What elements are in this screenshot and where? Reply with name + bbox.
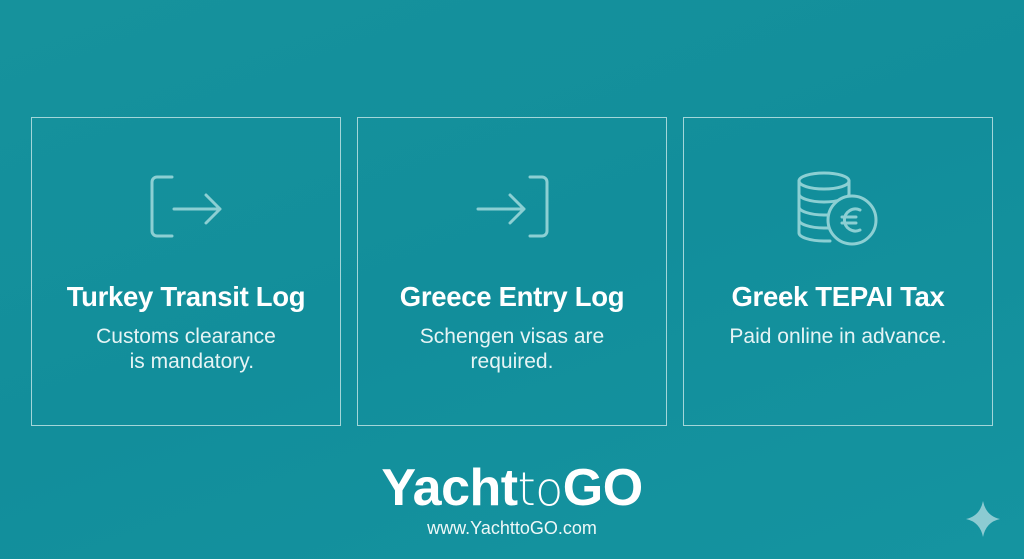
logo: YachttoGO xyxy=(381,459,643,517)
icon: exit arrow xyxy=(150,176,222,238)
url: www.YachttoGO.com xyxy=(427,518,597,538)
text: turkey: Customs clearance xyxy=(96,325,276,348)
panel: tepai xyxy=(683,117,993,426)
text: greece: required. xyxy=(471,350,553,373)
icon: entry arrow xyxy=(476,176,548,238)
heading: tepai: Greek TEPAI Tax xyxy=(731,281,945,312)
text: turkey: is mandatory. xyxy=(130,350,254,373)
text: turkey xyxy=(96,325,276,373)
icon: coins euro xyxy=(798,172,878,246)
text: greece xyxy=(420,325,604,373)
heading: greece: Greece Entry Log xyxy=(400,281,624,312)
panel: greece xyxy=(357,117,667,426)
icon: sparkle xyxy=(966,501,1000,537)
text: tepai: Paid online in advance. xyxy=(729,325,947,348)
text: greece: Schengen visas are xyxy=(420,325,604,348)
heading: turkey: Turkey Transit Log xyxy=(67,281,305,312)
panel: turkey xyxy=(31,117,341,426)
